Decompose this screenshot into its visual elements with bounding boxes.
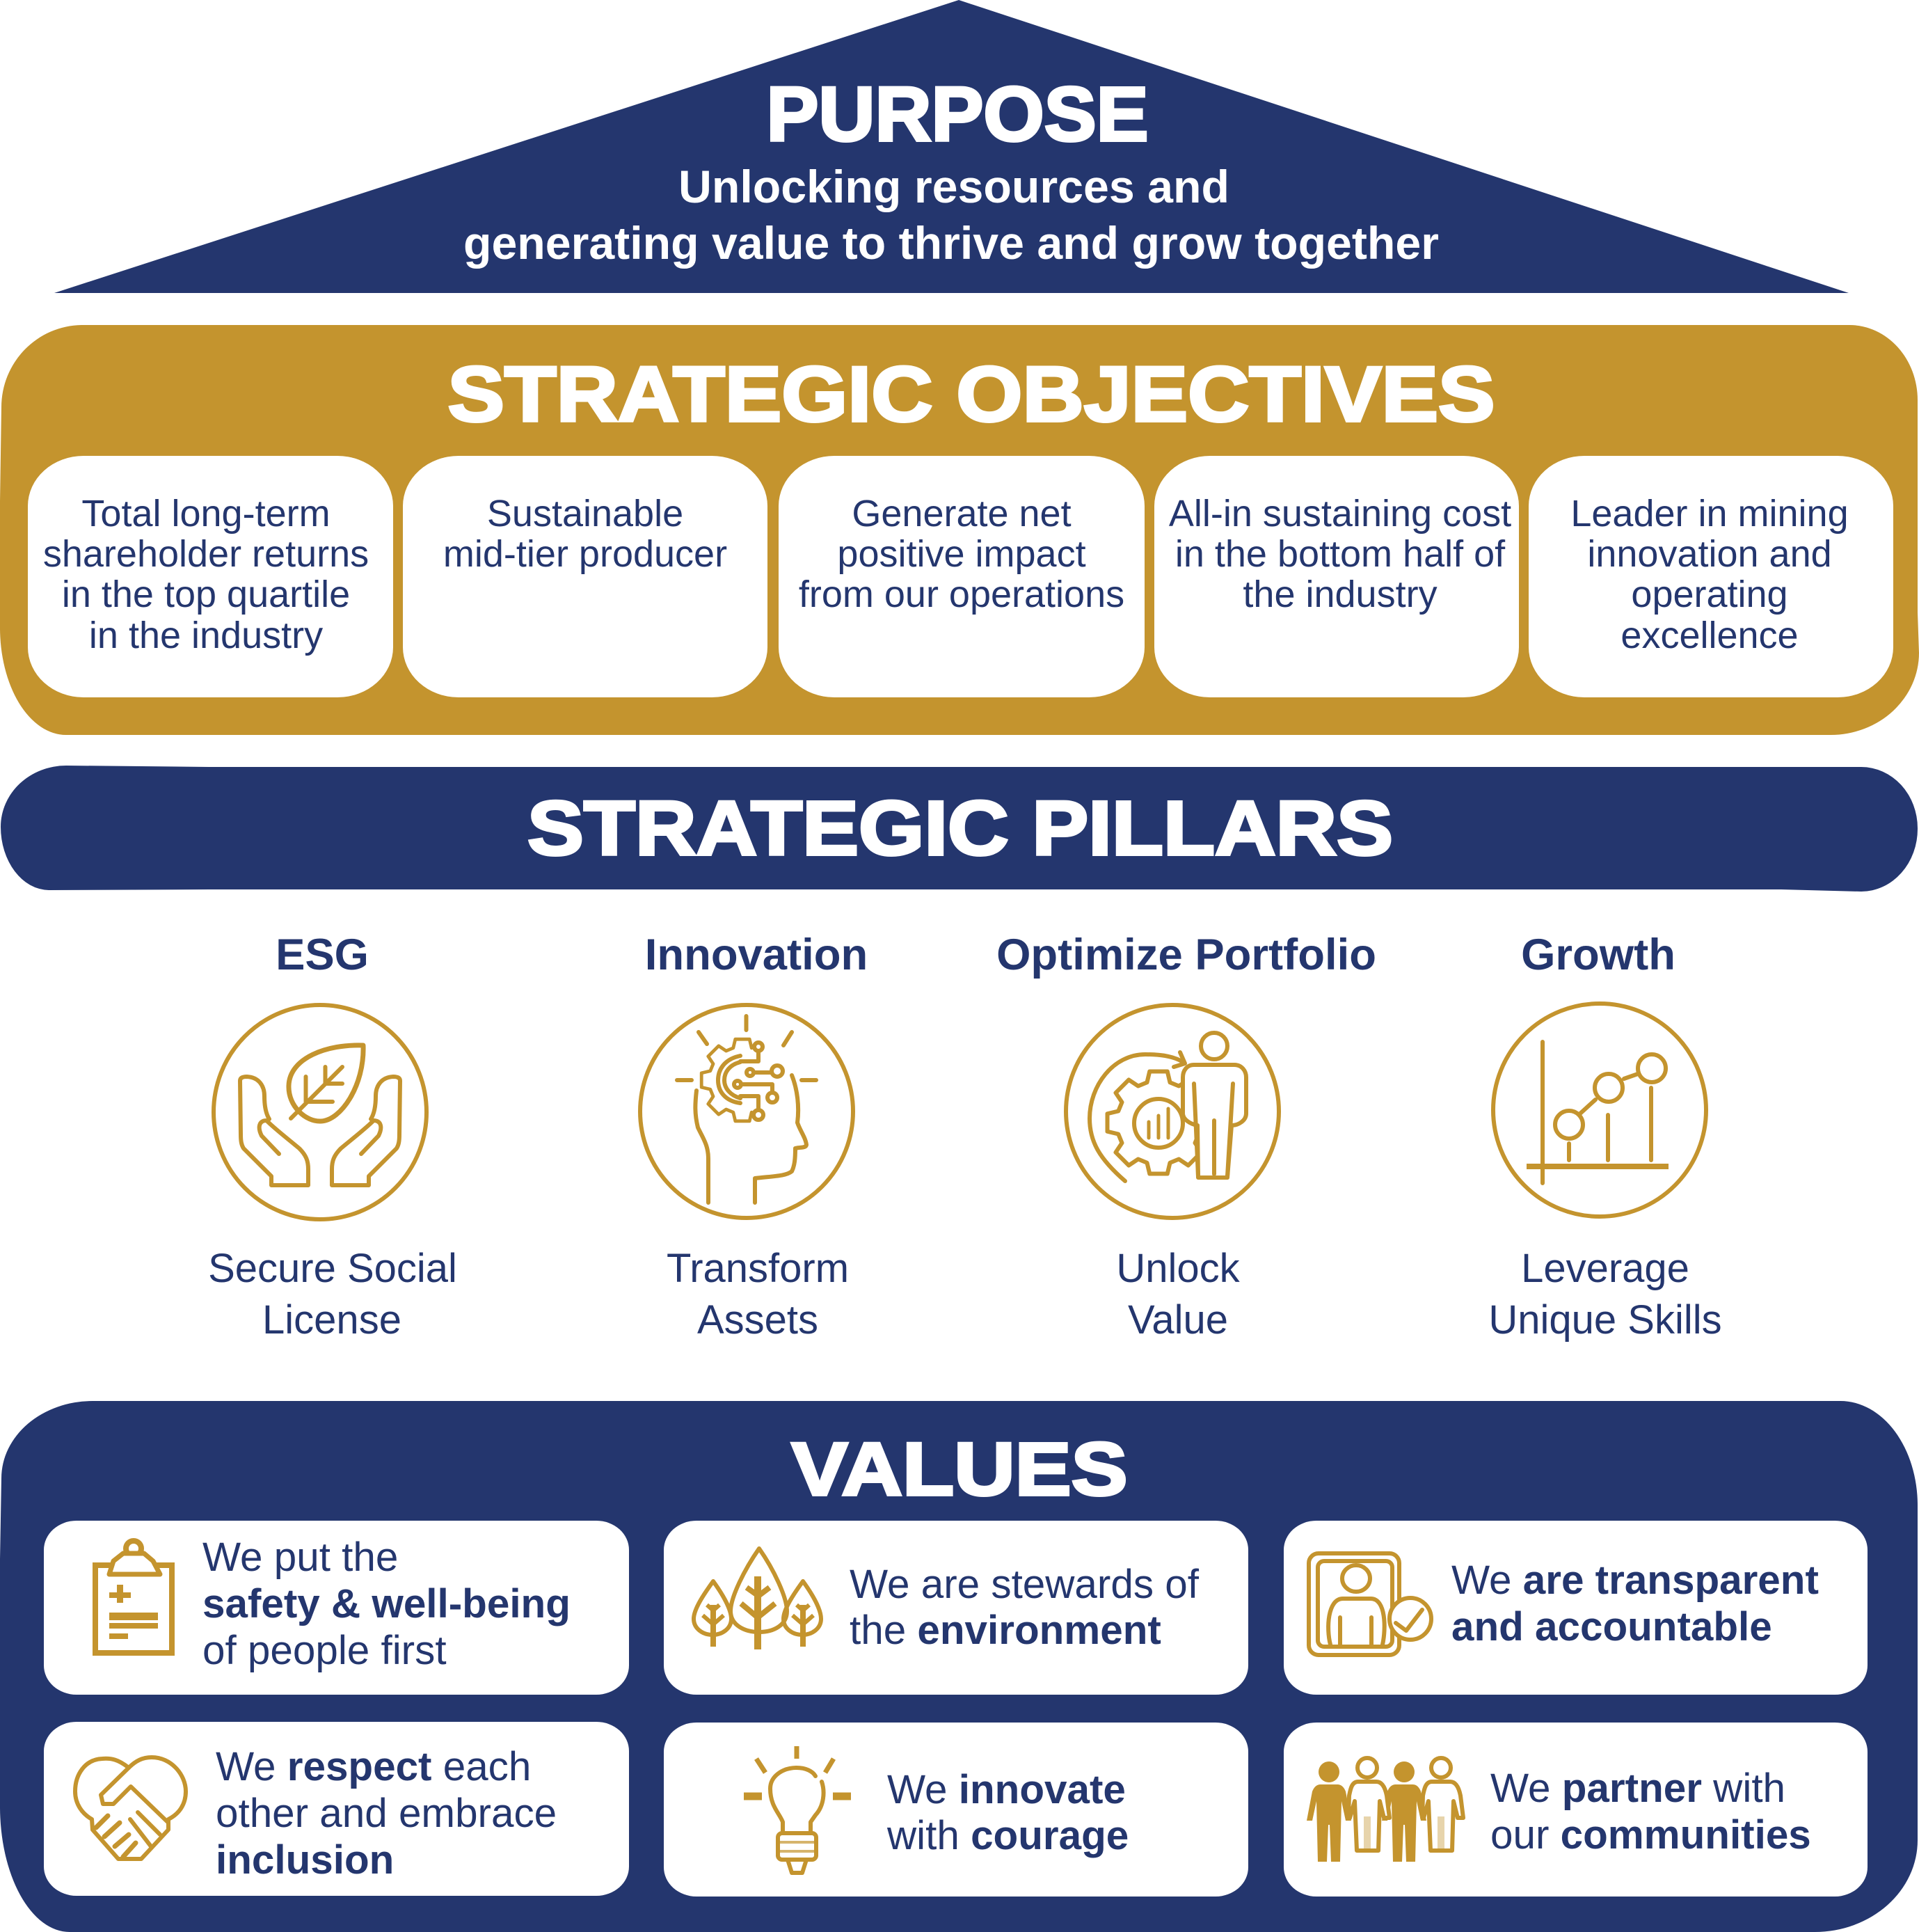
objective card 1: Total long-term	[81, 493, 331, 535]
panel: strategic pillars banner	[1, 766, 1918, 892]
pillar caption	[208, 1246, 457, 1343]
value text: We partner with	[1490, 1766, 1785, 1811]
value card: communities: our communities	[1490, 1812, 1811, 1858]
pillar caption: Leverage	[1521, 1246, 1689, 1291]
panel: values	[0, 1401, 1918, 1932]
objective card 3: Generate net	[852, 493, 1072, 535]
value card: environment	[664, 1521, 1248, 1695]
value card: transparency: and accountable	[1451, 1604, 1772, 1649]
pillar: Growth	[1488, 931, 1722, 1343]
objective card 3: positive impact	[837, 533, 1086, 575]
navy background	[0, 1401, 1918, 1932]
value text: We are transparent	[1451, 1558, 1819, 1603]
pillar caption: License	[262, 1297, 401, 1343]
value card: respect: inclusion	[216, 1837, 394, 1883]
value text: We innovate	[887, 1767, 1126, 1812]
pillar title: Optimize Portfolio	[996, 931, 1376, 979]
purpose statement: Unlocking resources and	[678, 161, 1229, 212]
objective card 5: Leader in mining	[1570, 493, 1849, 535]
value card: safety: of people first	[202, 1628, 447, 1673]
objective card 1: shareholder returns	[43, 533, 369, 575]
objective card 5: excellence	[1621, 615, 1799, 656]
icon: group of people	[1307, 1758, 1463, 1862]
objective card 5: operating	[1631, 573, 1788, 615]
gold background	[0, 325, 1919, 735]
panel: purpose roof	[54, 0, 1849, 293]
objective card 4: All-in sustaining cost	[1169, 493, 1511, 535]
value card: communities	[1284, 1723, 1868, 1897]
icon: gear and person	[1066, 1005, 1279, 1218]
objective card 1: in the top quartile	[62, 573, 350, 615]
icon: person in frame with check	[1309, 1553, 1431, 1655]
objective card 4	[1154, 456, 1519, 697]
pillar title: ESG	[276, 931, 369, 979]
value card: innovation: with courage	[886, 1813, 1129, 1858]
objective card 4: the industry	[1243, 573, 1438, 615]
objective card 2: mid-tier producer	[443, 533, 727, 575]
value card: innovation	[664, 1723, 1248, 1897]
pillar caption: Secure Social	[208, 1246, 457, 1291]
value card: transparency	[1284, 1521, 1868, 1695]
pillar title: Innovation	[645, 931, 868, 979]
objective card 5: innovation and	[1587, 533, 1832, 575]
pillar: Optimize Portfolio	[996, 931, 1376, 1343]
heading: strategic pillars: STRATEGIC PILLARS	[527, 786, 1393, 871]
pillar caption	[667, 1246, 849, 1343]
pillar caption	[1488, 1246, 1722, 1343]
pillar caption: Assets	[697, 1297, 818, 1343]
pillar caption: Unique Skills	[1488, 1297, 1722, 1343]
objective card 5	[1529, 456, 1893, 697]
objective card 4: in the bottom half of	[1175, 533, 1506, 575]
objective card 3: from our operations	[799, 573, 1124, 615]
purpose statement	[463, 161, 1439, 269]
value card: respect: other and embrace	[216, 1791, 557, 1836]
pillar: ESG	[208, 931, 457, 1343]
pillar caption: Transform	[667, 1246, 849, 1291]
icon: handshake heart	[75, 1757, 186, 1859]
pillar title: Growth	[1521, 931, 1675, 979]
objective card 1: in the industry	[89, 615, 323, 656]
value card: respect	[44, 1722, 629, 1896]
panel: strategic objectives	[0, 325, 1919, 735]
objective card 2	[403, 456, 767, 697]
objective card 3	[779, 456, 1145, 697]
purpose statement: generating value to thrive and grow together	[463, 217, 1439, 269]
pillar caption: Value	[1128, 1297, 1228, 1343]
value text: We put the	[202, 1535, 398, 1580]
icon: clipboard	[95, 1541, 172, 1653]
heading: strategic objectives: STRATEGIC OBJECTIVES	[448, 351, 1495, 438]
icon: head with gear	[640, 1005, 853, 1218]
icon: growth chart	[1493, 1004, 1706, 1217]
heading: purpose: PURPOSE	[767, 72, 1148, 157]
pillar: Innovation	[640, 931, 868, 1343]
roof triangle	[54, 0, 1849, 293]
pillar caption: Unlock	[1116, 1246, 1241, 1291]
value card: safety: safety & well-being	[202, 1581, 571, 1626]
pillar caption	[1116, 1246, 1241, 1343]
icon: light bulb	[744, 1746, 851, 1873]
value text: We respect each	[216, 1744, 531, 1789]
icon: three trees	[694, 1549, 821, 1649]
heading: values: VALUES	[792, 1427, 1127, 1511]
icon: hands holding leaf	[214, 1005, 427, 1219]
objective card 2: Sustainable	[487, 493, 683, 535]
objective card 1	[28, 456, 393, 697]
value card: environment: the environment	[850, 1608, 1161, 1653]
value card: safety	[44, 1521, 629, 1695]
value text: We are stewards of	[850, 1562, 1200, 1607]
